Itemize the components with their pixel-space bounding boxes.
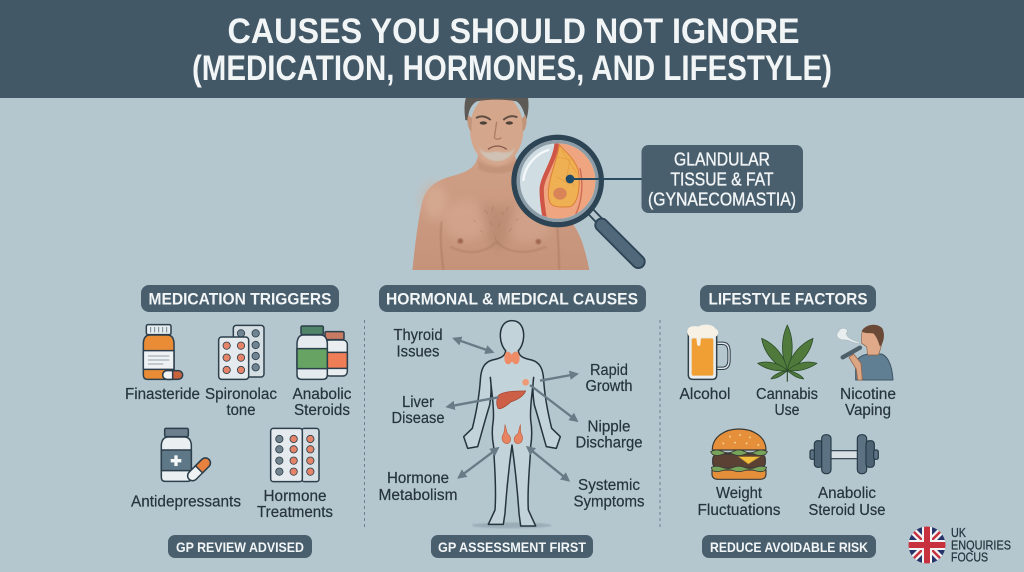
labels: medical causes: Thyroid xyxy=(394,327,442,344)
labels: lifestyle factors: Anabolic xyxy=(818,485,876,502)
labels: medications: Hormone xyxy=(264,488,326,505)
labels: medications: Antidepressants xyxy=(131,494,241,510)
labels: medical causes: Symptoms xyxy=(574,494,645,510)
logo: UK Enquiries Focus: FOCUS xyxy=(951,550,988,564)
medication icons xyxy=(143,325,347,483)
labels: medications: Spironolac xyxy=(205,386,277,403)
reproductive organs xyxy=(502,425,523,444)
heading: medication triggers xyxy=(141,285,339,312)
labels: medical causes: Liver xyxy=(402,394,434,411)
lifestyle icons xyxy=(687,325,893,479)
labels: lifestyle factors: Weight xyxy=(716,485,763,502)
labels: medications xyxy=(125,386,352,521)
liver xyxy=(497,391,526,409)
title xyxy=(192,12,832,88)
icon: beer mug xyxy=(687,325,729,379)
labels: medical causes: Rapid xyxy=(590,362,628,379)
logo: UK Enquiries Focus xyxy=(908,526,1011,564)
labels: medical causes: Hormone xyxy=(387,470,449,487)
icon: cannabis leaf xyxy=(758,325,817,382)
shirtless man xyxy=(412,93,589,270)
labels: medications: Steroids xyxy=(294,402,350,419)
labels: medical causes: Issues xyxy=(396,344,440,360)
panel: hormonal and medical causes xyxy=(378,285,646,558)
heading: hormonal and medical causes: HORMONAL & MEDICAL CAUSES xyxy=(386,290,638,308)
badge: GP assessment first: GP ASSESSMENT FIRST xyxy=(438,539,586,555)
panel: lifestyle factors xyxy=(680,285,896,558)
badge: GP assessment first xyxy=(431,535,593,558)
badge: GP review advised xyxy=(168,535,312,558)
heading: lifestyle factors: LIFESTYLE FACTORS xyxy=(708,290,868,308)
labels: medications: Finasteride xyxy=(125,386,200,403)
icon: person vaping xyxy=(837,325,893,380)
labels: lifestyle factors: Nicotine xyxy=(840,386,896,403)
labels: medical causes: Disease xyxy=(392,410,444,427)
labels: lifestyle factors: Fluctuations xyxy=(698,502,781,519)
callout: glandular tissue and fat: (GYNAECOMASTIA) xyxy=(648,190,796,210)
labels: medical causes: Nipple xyxy=(588,418,630,436)
icon: spironolactone blisters xyxy=(219,325,264,379)
icon: burger xyxy=(711,429,767,479)
header banner xyxy=(0,0,1024,98)
nipple highlight xyxy=(522,379,529,386)
title: (MEDICATION, HORMONES, AND LIFESTYLE) xyxy=(192,49,832,88)
icon: hormone treatment blister xyxy=(271,428,319,482)
labels: lifestyle factors xyxy=(680,386,896,519)
heading: medication triggers: MEDICATION TRIGGERS xyxy=(148,290,332,308)
callout leader line xyxy=(566,175,642,183)
arrows xyxy=(448,339,577,480)
labels: medical causes xyxy=(378,327,645,510)
callout: glandular tissue and fat: TISSUE & FAT xyxy=(670,170,774,190)
icon: finasteride bottle xyxy=(143,325,183,379)
badge: GP review advised: GP REVIEW ADVISED xyxy=(176,539,304,555)
labels: lifestyle factors: Alcohol xyxy=(680,386,730,403)
logo: UK Enquiries Focus: UK xyxy=(951,526,967,540)
body diagram xyxy=(448,321,577,528)
man with magnifying glass xyxy=(412,93,642,270)
heading: lifestyle factors xyxy=(700,285,876,312)
labels: medications: Anabolic xyxy=(292,386,352,403)
badge: reduce avoidable risk xyxy=(702,535,876,558)
labels: lifestyle factors: Steroid Use xyxy=(808,502,886,519)
title: CAUSES YOU SHOULD NOT IGNORE xyxy=(228,12,800,51)
icon: anabolic steroid bottles xyxy=(297,326,347,379)
callout: glandular tissue and fat: GLANDULAR xyxy=(674,150,770,170)
labels: medications: tone xyxy=(226,402,256,419)
panel: medication triggers xyxy=(125,285,352,558)
labels: lifestyle factors: Use xyxy=(774,402,800,419)
icon: magnifying glass handle xyxy=(591,212,638,262)
body outline xyxy=(464,321,560,526)
ground shadow xyxy=(472,522,552,528)
badge: reduce avoidable risk: REDUCE AVOIDABLE RISK xyxy=(710,539,868,555)
heading: hormonal and medical causes xyxy=(379,285,646,312)
labels: medications: Treatments xyxy=(257,504,333,521)
labels: medical causes: Growth xyxy=(586,378,632,395)
labels: medical causes: Systemic xyxy=(578,477,640,494)
column dividers xyxy=(364,320,660,527)
thyroid xyxy=(504,352,520,364)
labels: lifestyle factors: Cannabis xyxy=(756,386,818,403)
labels: medical causes: Metabolism xyxy=(378,487,458,504)
icon: union flag xyxy=(908,526,946,564)
logo: UK Enquiries Focus: ENQUIRIES xyxy=(951,538,1011,552)
labels: medical causes: Discharge xyxy=(576,434,642,452)
icon: magnifying glass lens with tissue xyxy=(514,137,607,225)
labels: lifestyle factors: Vaping xyxy=(845,402,891,419)
icon: antidepressants bottle xyxy=(161,428,212,483)
callout: glandular tissue and fat xyxy=(642,145,803,213)
icon: dumbbell xyxy=(810,435,878,474)
